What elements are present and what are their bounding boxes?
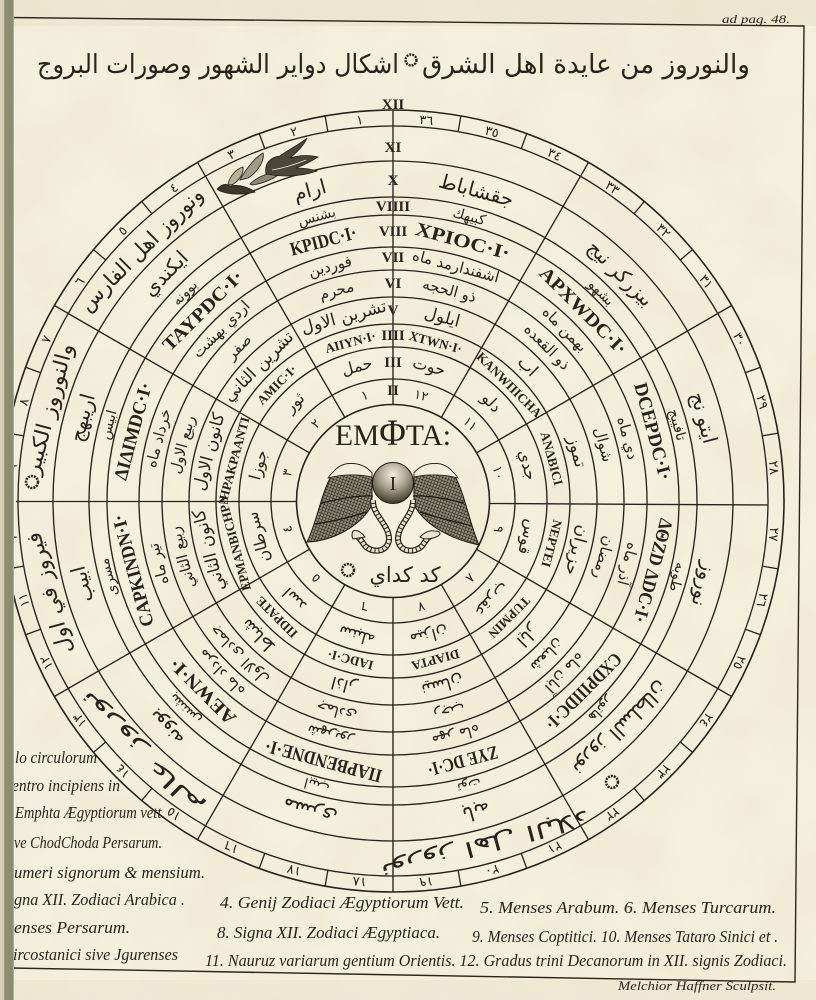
sector 8: Leo: بشنس: [166, 690, 204, 728]
sector 10: Gemini: كانون الاول: [190, 410, 230, 493]
sector 5: Scorpio: ٨: [462, 570, 477, 586]
sector 7: Virgo: IADC·I·: [326, 647, 375, 673]
sector 11: Taurus: اردي بهشت: [189, 297, 254, 362]
outer degree scale numbers: ٢٧: [765, 527, 781, 542]
outer degree scale numbers: ٣٢: [653, 221, 673, 241]
legend: right columns: 8. Signa XII. Zodiaci Ægyptiaca.: [217, 923, 440, 942]
sector 5: Scorpio: هاتور: [585, 692, 618, 725]
sector 9: Cancer: [21, 467, 312, 657]
ring numerals on the vertical axis: X: [388, 173, 399, 189]
sector 9: Cancer: مسرى: [96, 556, 122, 598]
outer degree scale numbers: ٢٩: [752, 394, 771, 411]
sector 12: Aries: محرم: [317, 277, 356, 304]
sector 1: Pisces: حوت: [410, 353, 448, 381]
sector 5: Scorpio: [420, 528, 673, 781]
sector 2: Aquarius: اب: [513, 352, 542, 381]
legend: right columns: 11. Nauruz variarum gentium Orientis. 12. Gradus trini Decanorum in XII. signis Zodiaci.: [205, 951, 787, 970]
outer degree scale numbers: ٣: [225, 147, 238, 164]
sector 7: Virgo: ٦: [360, 598, 370, 614]
sector 4: Sagittarius: ΔΘZD ΔDC·I·: [628, 516, 676, 625]
ring numerals on the vertical axis: XI: [385, 140, 401, 156]
outer degree scale numbers: ٣٣: [602, 178, 622, 199]
sector 1: Pisces: كبيهك: [451, 205, 488, 229]
sector 4: Sagittarius: NEPTEI: [538, 518, 565, 569]
ring numerals on the vertical axis: VIII: [379, 224, 407, 240]
sector 10: Gemini: جوزا: [245, 448, 272, 482]
outer degree scale numbers: ١٤: [113, 761, 133, 781]
ring numerals on the vertical axis: VI: [385, 276, 401, 292]
sector 4: Sagittarius: طوبه: [665, 561, 689, 594]
sector 2: Aquarius: ١١: [459, 414, 480, 435]
sector 6: Libra: DIAPTA: [409, 646, 461, 674]
ring numerals on the vertical axis: VII: [382, 250, 404, 266]
outer degree scale numbers: ٤: [167, 180, 181, 197]
sector 4: Sagittarius: رمضان: [589, 534, 618, 581]
sector 8: Leo: نوروز عالم: [74, 685, 209, 820]
sector 12: Aries: فوردين: [306, 252, 354, 281]
sector 2: Aquarius: ذو القعده: [520, 320, 574, 374]
outer degree scale numbers: ٢٦: [752, 591, 771, 608]
sector 3: Capricorn: ١٠: [489, 464, 507, 482]
sector 11: Taurus: TAYPDC·I·: [159, 267, 248, 356]
outer degree scale numbers: ٥: [115, 223, 131, 239]
sector 10: Gemini: ربيع الاول: [166, 413, 199, 476]
title: Arabic heading: [37, 50, 750, 80]
sector 1: Pisces: ايلول: [422, 303, 462, 332]
sector 9: Cancer: كانون الثاني: [189, 506, 230, 593]
sector 9: Cancer: CAPKINDN·I·: [109, 512, 159, 629]
emblem caption with sun symbol: كد كداي: [370, 563, 440, 587]
sector 4: Sagittarius: نوروز: [687, 559, 722, 609]
sector 3: Capricorn: [478, 366, 729, 523]
sector 10: Gemini: [20, 341, 313, 541]
sector 12: Aries: [264, 167, 409, 415]
sector 3: Capricorn: تافيبج: [665, 407, 689, 443]
sector 11: Taurus: بوونه: [169, 277, 201, 309]
central emblem: winged orb with serpents: I: [390, 473, 396, 495]
sector 4: Sagittarius: حزيران: [560, 523, 593, 578]
sector 10: Gemini: HPAKPAANTI: [216, 415, 252, 502]
outer degree scale numbers: ٨: [16, 397, 33, 408]
ring numerals on the vertical axis: VIIII: [376, 199, 410, 215]
sector 8: Leo: بوونه: [142, 705, 189, 752]
sector 11: Taurus: [74, 182, 380, 488]
sector 12: Aries: تشرين الاول: [299, 296, 389, 338]
sector 12: Aries: ١: [360, 388, 370, 404]
sector 9: Cancer: ربيع الثاني: [166, 524, 200, 590]
outer degree scale numbers: ٣٦: [419, 113, 434, 129]
sector 2: Aquarius: KANWΠICHA: [474, 349, 545, 421]
legend: left column: entro incipiens in: [12, 776, 120, 795]
sector 6: Libra: بابه: [460, 797, 493, 827]
sector 7: Virgo: ΠAPBENDNE·I·: [263, 735, 384, 786]
outer degree scale numbers: ٧: [39, 333, 56, 346]
sector 12: Aries: حمل: [339, 353, 374, 379]
outer degree scale numbers: [5, 113, 781, 889]
sector 10: Gemini: ΔIΔIMDC·I·: [111, 380, 157, 483]
sector 11: Taurus: AMIC·I·: [254, 362, 300, 408]
ring numerals on the vertical axis: XII: [382, 97, 404, 113]
sector 2: Aquarius: بشهو: [584, 276, 617, 309]
sector 8: Leo: ٥: [308, 570, 324, 585]
outer degree scale numbers: ١٧: [286, 860, 303, 879]
sector 12: Aries: KPIDC·I·: [288, 223, 359, 261]
sector 11: Taurus: تشرين الثاني: [219, 327, 298, 406]
outer degree scale numbers: ٣٥: [483, 123, 500, 142]
sector 3: Capricorn: ANΔBICI: [538, 430, 566, 487]
outer degree scale numbers: ٢: [289, 124, 300, 141]
legend: left column: lo circulorum: [15, 748, 97, 767]
sector 7: Virgo: جمادى: [314, 698, 359, 726]
sun symbol in the outer band: [606, 776, 618, 788]
outer degree scale numbers: ١٨: [352, 873, 367, 889]
sector 10: Gemini: ٣: [280, 468, 296, 478]
sector 2: Aquarius: دلو: [476, 388, 506, 417]
sector 8: Leo: [74, 514, 380, 820]
legend: right columns: 9. Menses Coptitici. 10. Menses Tataro Sinici et .: [472, 927, 778, 946]
sector 8: Leo: اسد: [278, 584, 310, 616]
sector 8: Leo: شباط: [237, 614, 280, 657]
sector 5: Scorpio: عقرب: [470, 578, 513, 621]
sector 5: Scorpio: آبان ماه: [540, 649, 589, 697]
sector 12: Aries: AIIYN·I·: [323, 328, 377, 356]
central emblem: winged orb with serpents: [307, 462, 479, 551]
sector 10: Gemini: ابيس: [97, 408, 121, 441]
outer degree scale numbers: ٢٣: [653, 761, 673, 781]
outer degree scale numbers: ١٢: [37, 653, 57, 672]
sector 12: Aries: بشنس: [296, 204, 338, 230]
sector 5: Scorpio: نوروز السلطان: [568, 676, 673, 781]
legend: left column: [12, 748, 205, 964]
page reference: ad pag. 48.: [722, 12, 790, 26]
sector 11: Taurus: ٢: [309, 416, 324, 432]
legend: right columns: 5. Menses Arabum. 6. Menses Turcarum.: [480, 898, 776, 917]
sector 8: Leo: جمادى الاول: [205, 622, 272, 689]
title: Arabic heading: والنوروز من عايدة اهل الشرق: [422, 50, 750, 80]
sector 4: Sagittarius: قوس: [513, 517, 542, 557]
sector 6: Libra: ٧: [416, 598, 426, 614]
sector 5: Scorpio: CXDPIIIDC·I·: [540, 648, 626, 734]
legend: left column: gna XII. Zodiaci Arabica .: [14, 890, 185, 909]
ring numerals on the vertical axis: V: [388, 303, 399, 319]
outer degree scale numbers: ١٦: [222, 837, 241, 857]
sector 3: Capricorn: تموز: [563, 433, 590, 470]
outer degree scale numbers: ١١: [15, 591, 34, 608]
sector 2: Aquarius: بيزركر نيج: [583, 235, 659, 311]
sector 2: Aquarius: [424, 224, 670, 470]
sector 7: Virgo: مسرى: [280, 793, 339, 831]
outer degree scale numbers: ١٩: [419, 873, 434, 889]
sector 4: Sagittarius: آذر ماه: [613, 541, 642, 588]
sector 6: Libra: مهر ماه: [430, 721, 482, 751]
sector 1: Pisces: XPIOC·I·: [413, 219, 512, 264]
sector 7: Virgo: اذار: [329, 672, 360, 698]
sector 6: Libra: نوروز اهل البلاد: [378, 805, 592, 884]
sector 10: Gemini: خرداد ماه: [142, 407, 175, 470]
outer degree scale ticks: [8, 116, 778, 886]
ring numerals on the vertical axis: IIII: [381, 328, 405, 344]
outer degree scale numbers: ١: [356, 113, 364, 129]
sector 7: Virgo: [249, 583, 425, 839]
outer degree scale numbers: ٣٠: [729, 330, 749, 349]
sector 1: Pisces: ١٢: [412, 387, 430, 405]
sector 3: Capricorn: DCEPDC·I·: [629, 380, 675, 483]
sector 6: Libra: رجب: [432, 699, 467, 724]
sector 10: Gemini: والنوروز الكبير: [20, 341, 78, 478]
sector 6: Libra: ميزان: [408, 621, 450, 650]
sector 12: Aries: ارام: [291, 174, 329, 206]
sector 11: Taurus: ونوروز اهل الفارس: [74, 182, 208, 316]
legend: right columns: [205, 893, 787, 970]
legend: left column: ircostanici sive Jgurenses: [13, 945, 178, 964]
sector 8: Leo: ΠDPATE: [253, 594, 300, 641]
outer degree scale numbers: ١٥: [164, 803, 184, 824]
sector 4: Sagittarius: [477, 475, 729, 639]
legend: right columns: 4. Genij Zodiaci Ægyptiorum Vett.: [220, 893, 464, 912]
sector 1: Pisces: ذو الحجه: [421, 275, 478, 306]
sector 1: Pisces: [372, 166, 526, 416]
sector 6: Libra: [315, 571, 592, 884]
sector 3: Capricorn: جدي: [514, 448, 541, 482]
circular diagram rings and spokes: [2, 110, 784, 892]
sector 3: Capricorn: دي ماه: [612, 415, 642, 462]
ring numerals on the vertical axis: III: [384, 355, 402, 371]
sector 11: Taurus: ثور: [280, 388, 309, 418]
sector 8: Leo: AEWN·I·: [166, 653, 241, 728]
engraver signature: Melchior Haffner Sculpsit.: [617, 978, 776, 993]
legend: left column: Emphta Ægyptiorum vett.: [14, 803, 165, 822]
sector 8: Leo: مرداد ماه: [194, 646, 248, 700]
sector 11: Taurus: صفر: [222, 330, 255, 364]
sector 5: Scorpio: TUPMIN: [485, 593, 533, 642]
sector 6: Libra: نيسان: [419, 669, 465, 700]
sector 9: Cancer: EPMANBICHPA: [214, 494, 254, 592]
sector 5: Scorpio: ايار: [512, 619, 543, 650]
sector 11: Taurus: ايكندي: [138, 246, 194, 302]
sector 5: Scorpio: شعبان: [527, 635, 568, 676]
ring numerals on the vertical axis: [376, 97, 410, 399]
legend: left column: umeri signorum & mensium.: [14, 863, 205, 882]
outer degree scale numbers: ٢٢: [602, 803, 622, 824]
outer degree scale numbers: ١٣: [70, 710, 91, 730]
sector 2: Aquarius: بهمن ماه: [539, 303, 591, 355]
sector 10: Gemini: اريبهج: [64, 391, 100, 444]
emblem title: ΕΜΦΤΑ:: [335, 413, 451, 454]
sector 7: Virgo: شهريور: [305, 721, 356, 751]
outer degree scale numbers: ٩: [5, 464, 21, 472]
sector 1: Pisces: جقشاباط: [436, 168, 516, 211]
icon: engraved plant sprig: [217, 138, 318, 194]
sun symbol on the left outer band: [26, 476, 38, 488]
book binding strip: [0, 0, 14, 1000]
sector 9: Cancer: ٤: [280, 524, 296, 534]
legend: left column: ve ChodChoda Persarum.: [14, 833, 162, 852]
sector 9: Cancer: سرطان: [242, 509, 275, 564]
sector 1: Pisces: XTWN·I·: [407, 328, 464, 356]
outer degree scale numbers: ٢٠: [483, 860, 500, 879]
sector 9: Cancer: تير ماه: [144, 541, 172, 587]
sector 3: Capricorn: شوال: [590, 425, 617, 464]
title: Arabic heading: اشكال دواير الشهور وصورات البروج: [37, 50, 399, 80]
outer degree scale numbers: ١٠: [5, 527, 21, 542]
outer degree scale numbers: ٣١: [695, 272, 716, 292]
sector 7: Virgo: سنبله: [337, 622, 377, 650]
outer degree scale numbers: ٢٤: [695, 710, 716, 730]
outer degree scale numbers: ٣٤: [545, 145, 564, 165]
legend: left column: enses Persarum.: [14, 918, 130, 937]
sector 7: Virgo: ابيب: [302, 774, 331, 796]
sector 1: Pisces: اشفندارمد ماه: [410, 246, 501, 287]
sector 4: Sagittarius: ٩: [490, 524, 506, 534]
outer degree scale numbers: ٢١: [545, 837, 564, 857]
sector 9: Cancer: ابيب: [66, 563, 98, 605]
sector 3: Capricorn: ايتو نج: [686, 389, 722, 446]
sector 6: Libra: توت: [455, 774, 483, 796]
sector 6: Libra: ZYE DC·I·: [425, 741, 500, 780]
sector 2: Aquarius: APXWDC·I·: [535, 263, 631, 359]
ring numerals on the vertical axis: II: [387, 383, 399, 399]
sector 9: Cancer: فيروز في اول: [21, 530, 77, 657]
outer degree scale numbers: ٢٥: [729, 653, 749, 672]
outer degree scale numbers: ٦: [72, 275, 89, 289]
outer degree scale numbers: ٢٨: [765, 460, 781, 475]
